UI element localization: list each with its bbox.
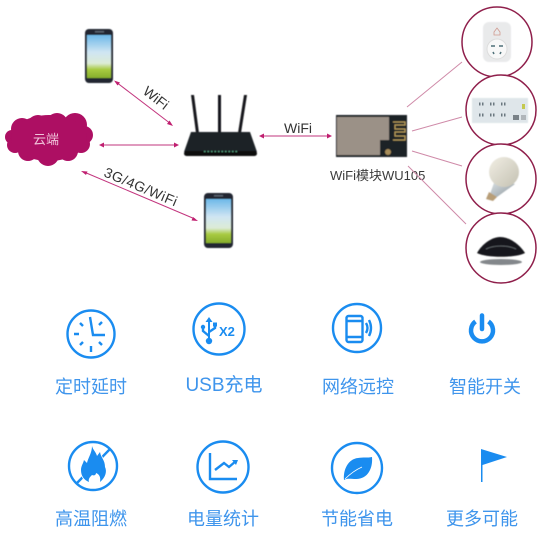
label: WiFi top: WiFi: [140, 83, 172, 113]
feature: USB充电: [185, 304, 263, 396]
label: 网络远控: [322, 377, 394, 397]
feature: 节能省电: [321, 443, 393, 529]
label: module name: WiFi模块WU105: [330, 168, 425, 183]
label: 节能省电: [321, 509, 393, 529]
device: IR remote hub: [466, 213, 536, 283]
icon: flag: [481, 449, 507, 482]
feature: 高温阻燃: [55, 442, 127, 529]
label: 定时延时: [55, 377, 127, 397]
phone: top: [85, 29, 113, 83]
device: power strip: [466, 75, 536, 145]
label: USB充电: [185, 374, 263, 396]
arrow: cloud to router: [99, 142, 179, 148]
label: 更多可能: [446, 509, 518, 529]
device: LED bulb: [466, 144, 536, 214]
feature: 网络远控: [322, 304, 394, 397]
arrow: cloud to bottom phone: [81, 171, 198, 221]
arrow: top phone to router: [114, 80, 173, 126]
feature: 定时延时: [55, 310, 127, 397]
router: [184, 95, 257, 156]
icon: USB x2: X2: [219, 324, 235, 339]
wifi module: [336, 115, 407, 157]
label: 智能开关: [449, 377, 521, 397]
device: smart plug: [462, 7, 532, 77]
icon: no fire: [69, 442, 117, 490]
icon: clock: [68, 310, 114, 358]
icon: line chart: [198, 442, 248, 492]
label: 3G/4G/WiFi: 3G/4G/WiFi: [102, 164, 180, 209]
feature: 电量统计: [187, 442, 259, 529]
arrow: router to module: [259, 134, 332, 138]
label: 电量统计: [187, 509, 259, 529]
connector lines: [407, 62, 466, 224]
icon: power: [471, 316, 493, 341]
cloud: [5, 113, 93, 166]
icon: phone signal: [333, 304, 381, 352]
feature: 智能开关: [449, 316, 521, 397]
label: WiFi middle: WiFi: [284, 120, 312, 136]
feature: 更多可能: [446, 449, 518, 529]
label: 高温阻燃: [55, 509, 127, 529]
phone: bottom: [204, 193, 233, 248]
icon: leaf: [332, 443, 382, 493]
cloud label: 云端: [33, 132, 59, 147]
